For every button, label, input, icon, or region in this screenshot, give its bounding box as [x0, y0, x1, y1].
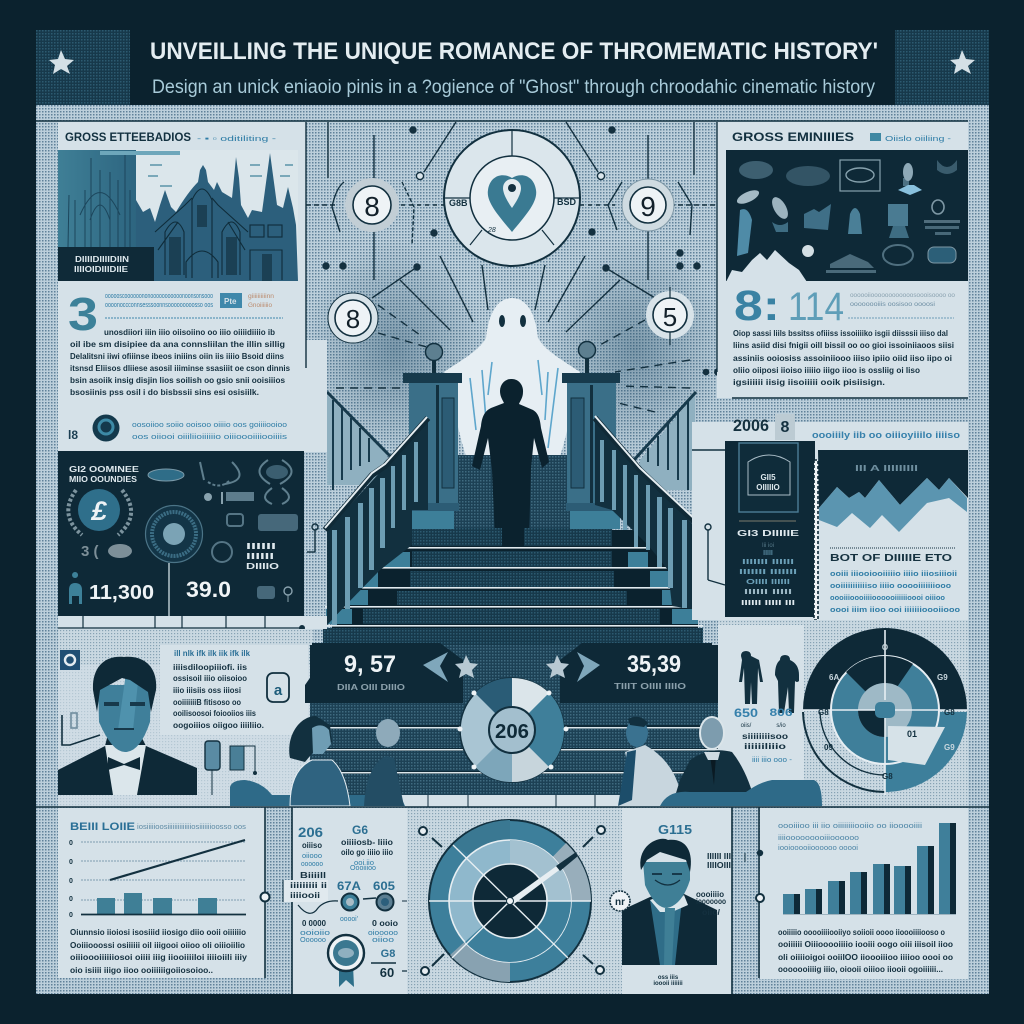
stat 8:114: 8: — [734, 282, 780, 330]
body paragraph: itsnsd Eliisos dliiese asosil iiiminse ssasiiit oe cson dinnis — [70, 364, 291, 373]
round icon row — [68, 414, 287, 442]
ring chart: 01 — [907, 729, 917, 739]
callout box: iiiiooii — [290, 891, 320, 900]
name code: G115 — [658, 822, 692, 837]
year badge: 8 — [781, 419, 790, 436]
side labels: iooooooo — [696, 897, 726, 906]
divider ticks under awards — [58, 616, 327, 631]
mountain chart: III A IIIIIIIII — [855, 464, 918, 473]
year badge — [775, 414, 795, 440]
cathedral caption: DIIIIDIIIIDIIN — [75, 255, 129, 264]
ring chart: G9 — [944, 743, 955, 752]
number badge 5 lower right — [646, 287, 694, 345]
panel: top right gross earnings — [717, 122, 968, 398]
ghost figure — [444, 298, 580, 468]
paragraph — [70, 928, 248, 975]
needle — [512, 852, 578, 904]
grey mini marks: 3 ( — [81, 543, 99, 560]
side labels: IIIIII III — [707, 852, 731, 861]
paragraph: oli oiiiioigoi ooiiIOO iioooiiioo iiiioo oooi oo — [778, 953, 953, 962]
front balusters right — [595, 420, 698, 610]
chart heading: BEIII LOIIE — [70, 821, 135, 833]
round icon row: oosoiioo soiio ooisoo oiiiio oos goiiiiooioo — [132, 420, 287, 429]
right star box — [895, 30, 989, 105]
side labels: IIIIOIII — [707, 861, 731, 870]
panel: top left gross earnings — [58, 122, 327, 452]
stat notes: oooooscoooooononooooooooooonoonsonsooo — [105, 291, 213, 300]
paragraph: oiiioooiiiiiiosoi oiiii iiig iiooiiiiloi iiiioiili iiiy — [70, 953, 248, 962]
award ribbon badge — [328, 935, 364, 987]
stat 39.0: 39.0 — [186, 577, 231, 602]
block heading: GI2 OOMINEE — [69, 465, 140, 474]
side label: IIIIII — [246, 542, 276, 551]
stat 8:114: 114 — [788, 285, 844, 329]
connector hook — [692, 450, 725, 585]
paragraph: ooiiiiio ooooiiiiooiiyo soiioii oooo iioooiiiiooso o — [778, 928, 945, 937]
year label: 2006 — [733, 416, 769, 435]
callout box: Biiiill — [300, 871, 326, 880]
portrait caption text — [173, 649, 264, 730]
left handrail — [325, 418, 428, 530]
cathedral caption — [58, 247, 154, 281]
small labels lower: ooooi' — [340, 914, 359, 923]
panel: lower right people and ring chart — [718, 620, 968, 806]
grey mini marks — [81, 543, 132, 560]
side labels: oiio/ — [702, 908, 721, 917]
side label: DIIIIO — [246, 562, 279, 571]
person: woman seated — [289, 716, 350, 806]
right stat banner: TIIIT OIIII IIIIO — [614, 682, 686, 691]
gear label — [610, 891, 630, 911]
blue paragraph: oooiiioooiiiioooooiiiiiioooi oiiioo — [830, 593, 945, 602]
big compass circle with location pin: 28 — [487, 227, 496, 234]
connector lines and dots — [303, 122, 721, 412]
panel: lower right 2006 block — [692, 414, 968, 620]
stat fraction: G8 — [381, 948, 395, 960]
stat notes — [848, 293, 956, 318]
chart notes: iiiiooooooooiiioooooo — [778, 835, 859, 842]
medal links — [298, 894, 413, 913]
body paragraph: liins asiid disi fnigii oill bissil oo oo gioi issoiniiaoos siisi — [733, 341, 954, 350]
chart notes — [778, 823, 923, 852]
poster panel: OIIII IIIIII — [746, 577, 790, 586]
concentric disk — [146, 506, 202, 616]
stat notes: Pte — [224, 297, 237, 306]
big compass circle with location pin — [444, 130, 580, 266]
body paragraph: bsosiinis pss osil i do bisbssii sins esi osisiilk. — [70, 388, 259, 397]
stat notes: giiiiiiiiiinn — [248, 294, 274, 300]
blue paragraph — [830, 548, 960, 614]
small connector hook — [307, 524, 318, 552]
body paragraph: unosdiiori iiin iiio oiisoiino oo iiio oiiiidiiiio ib — [104, 328, 275, 337]
portrait caption: ioooii iiiiiii — [653, 981, 683, 987]
poster panel: GII5 — [760, 473, 776, 482]
figure stats: 806 — [770, 707, 792, 719]
body paragraph: oil ibe sm disipiee da ana connsliilan the illin sillig — [70, 340, 285, 349]
bars — [783, 823, 956, 915]
small labels lower: oiioo — [372, 935, 394, 944]
short labels: oiiooo — [302, 851, 322, 860]
ring chart: O — [882, 643, 888, 652]
poster panel: IIIIII IIIII III — [741, 598, 795, 607]
device icons — [205, 741, 257, 795]
right stat banner — [546, 643, 718, 703]
tile strip under steps — [400, 795, 640, 807]
short labels: oilo go iiiio iiio — [341, 848, 393, 857]
side label: IIIIII — [246, 552, 274, 561]
number badge 9 upper right: 9 — [640, 191, 656, 222]
poster panel: OIIIIIO — [756, 483, 780, 492]
number badge 9 upper right — [608, 179, 692, 235]
portrait caption text: iiio iiisiis oss iiiosi — [173, 686, 241, 695]
cathedral caption: IIIIOIDIIIDIIE — [74, 265, 129, 274]
stat fraction: 60 — [380, 965, 394, 980]
title: UNVEILLING THE UNIQUE ROMANCE OF THROMEMATIC HISTORY' — [150, 38, 878, 65]
big compass circle with location pin: G8B — [449, 198, 468, 208]
figure stats — [734, 706, 793, 764]
body paragraph: oliio oiiposi iioiso iiiiio iiigo iioo is ossliig oi liso — [733, 366, 920, 375]
right stat banner: 35,39 — [627, 651, 681, 678]
stat notes: Gnoiiiiiio — [248, 303, 273, 309]
stat 67A: 67A — [337, 879, 361, 893]
ring chart: 6A — [829, 673, 839, 682]
sofa left — [230, 780, 405, 806]
line and bar chart: 0 — [69, 840, 73, 847]
dotted strip — [814, 460, 818, 620]
dark shading under the figure — [438, 455, 578, 545]
person icon — [69, 572, 82, 604]
paragraph: ooiiiiii Oiiiooooiiiio iooiii oogo oiii iiisoil iioo — [778, 940, 953, 949]
heading suffix — [870, 133, 952, 143]
stat notes — [105, 291, 283, 318]
microphone icon — [62, 713, 100, 745]
right handrail — [595, 418, 698, 525]
paragraph — [778, 928, 953, 974]
portrait: man in suit — [622, 839, 717, 965]
panel: bottom portrait — [610, 808, 731, 994]
poster panel: Iii ioi — [762, 543, 774, 549]
line and bar chart: 0 — [69, 859, 73, 866]
poster panel: IIIIIII IIIIIII — [739, 567, 797, 576]
stat notes: oooonoccconnsesssoonnsooooooooosso oos — [105, 300, 213, 309]
small labels lower — [300, 914, 398, 944]
stat notes: oooooiioooooooooooosoooisoooo oo — [850, 293, 956, 299]
callout box — [283, 871, 328, 902]
header banner — [36, 30, 989, 105]
side label — [212, 542, 279, 571]
back railing right — [634, 392, 696, 490]
medal with laurel: £ — [90, 496, 107, 526]
side labels — [696, 852, 731, 917]
figure stats: oiis/ — [741, 723, 752, 729]
left stat banner — [305, 643, 478, 703]
stat 605: 605 — [373, 879, 395, 893]
body paragraph: assiniis ooiosiss assoiniiooo iiiso ipiio oiid iiso iipo oi — [733, 354, 952, 363]
big compass circle with location pin: BSD — [557, 197, 577, 207]
right newel post — [562, 342, 622, 529]
small labels lower: 0 ooio — [372, 919, 398, 928]
stat G6: G6 — [352, 823, 368, 837]
body paragraph — [733, 329, 954, 387]
left star box — [36, 30, 130, 105]
number badge 8 lower left: 8 — [346, 304, 360, 334]
panel: bottom middle stats — [283, 807, 420, 994]
small labels lower: ooioiio — [300, 928, 330, 937]
portrait caption text: ill nlk ifk ilk iik ifk ilk — [174, 649, 251, 658]
heading: GROSS EMINIIIES — [732, 130, 854, 144]
small labels lower: oiooooo — [368, 928, 398, 937]
sub heading: BOT OF DIIIIIE ETO — [830, 552, 952, 564]
figure stats: 650 — [734, 706, 758, 720]
ring chart — [803, 628, 967, 795]
poster panel — [725, 441, 815, 617]
line and bar chart — [69, 840, 246, 919]
paragraph: Oiunnsio iioiosi isosiiid iiosigo diio ooii oiiiiiio — [70, 928, 246, 937]
wheel chart: 206 — [495, 721, 529, 743]
ring chart: G8 — [944, 708, 955, 717]
portrait caption text: ooiiiiiiiB fitisoso oo — [173, 698, 241, 707]
small labels lower: Oooooo — [300, 935, 326, 944]
right handrail highlight — [595, 416, 699, 523]
number badge 8 lower left — [328, 293, 378, 343]
big number 3: 3 — [68, 288, 98, 340]
medal with laurel — [68, 489, 131, 535]
sofa right — [660, 780, 822, 806]
body paragraph: bsin asoiik insig disjin lios soilish oo gsio snii ooisiiios — [70, 376, 286, 385]
short labels: oiiiso — [302, 841, 322, 850]
at icon: a — [274, 682, 283, 699]
short labels: ooi iio — [354, 858, 374, 867]
film icon wall — [726, 150, 968, 282]
ring chart: G8 — [818, 708, 829, 717]
main steps — [320, 528, 703, 645]
ring chart: 09 — [824, 743, 833, 752]
short labels — [301, 838, 393, 872]
left stat banner: DIIA OIII DIIIO — [337, 683, 405, 692]
short labels: Oooiiioo — [350, 863, 376, 872]
figure stats: iiii iiio ooo - — [752, 755, 793, 764]
wheel chart — [458, 678, 568, 782]
portrait caption text: iiiisdiloopiiiofi. iis — [173, 663, 248, 672]
portrait caption: oss iiis — [658, 975, 679, 981]
left newel post — [403, 344, 462, 529]
pill logo — [148, 469, 184, 481]
panel lower extension — [58, 340, 327, 452]
blue sub heading: oooiiily iib oo oiiioyiiilo iiiiso — [812, 430, 961, 440]
small stat icons — [257, 586, 292, 602]
heading suffix: Oiislo oiiliing - — [885, 134, 952, 143]
poster panel: IIIII — [763, 550, 773, 557]
award laurels top — [200, 460, 292, 504]
panel: central staircase scene — [303, 122, 725, 645]
poster panel: IIIIII IIIII — [744, 587, 792, 596]
panel: awards dark block — [58, 451, 304, 616]
at icon — [267, 673, 289, 702]
paragraph: oio isiiii iiigo iioo ooiiiiiigoiiosoioo.. — [70, 966, 213, 975]
blue paragraph: ooiiiiiiiiiiiso iiiio ooooiiiiiiiooo — [830, 581, 951, 590]
silhouette man — [472, 379, 549, 540]
paragraph: ooooooiiiig iiio, oiooii oiiioo iiooii ogoiiiiii... — [778, 965, 943, 974]
ring chart: G8 — [882, 772, 893, 781]
chart notes: oooiiioo iii iio oiiiiiiiiooiio oo iiooooiiii — [778, 823, 923, 830]
portrait caption — [653, 975, 683, 987]
small labels lower: 0 0000 — [302, 919, 327, 928]
callout pins — [419, 826, 605, 975]
person: older man seated — [364, 719, 404, 806]
figure stats: siiiiiiiisoo — [742, 732, 788, 741]
front balusters left — [327, 420, 428, 625]
line and bar chart: 0 — [69, 878, 73, 885]
gear label: nr — [615, 897, 625, 908]
callout box: iiiiiiiii ii — [290, 881, 327, 890]
stat notes: oooooooiiis oosisoo oooosi — [850, 302, 935, 308]
chart notes: iooiooooiioooooo ooooi — [778, 845, 858, 852]
small logo row — [204, 492, 298, 531]
figure stats: s/io — [776, 723, 786, 729]
heading suffix: - ▪ ▫ oditiliting - — [197, 134, 277, 143]
divider line across page — [36, 806, 989, 808]
connector dots — [756, 850, 764, 902]
portrait caption text: ooilisoosoi foiooiios iiis — [173, 709, 256, 718]
halftone shading — [305, 240, 725, 460]
back railing left — [327, 392, 390, 490]
paragraph: Ooiiiooossi osiiiiii oil iiigooi oiioo oli oiiioiilio — [70, 941, 245, 950]
cathedral illustration — [58, 150, 298, 281]
number badge 8 upper left: 8 — [364, 191, 380, 222]
left handrail highlight — [325, 417, 427, 528]
ring chart: G9 — [937, 673, 948, 682]
person: man in vest — [618, 717, 680, 806]
panel: bottom right bar chart — [760, 808, 968, 979]
left stat banner: 9, 57 — [344, 651, 396, 678]
body paragraph: Oiop sassi liils bssitss ofiiiss issoiiiiko isgii diisssii iiiso dal — [733, 329, 948, 338]
side labels: oooiiiio — [696, 890, 724, 899]
panel: lower steps with people — [230, 643, 822, 807]
stat fraction — [371, 948, 420, 980]
blue paragraph: oooi iiim iioo ooi iiiiiiioooiiooo — [830, 605, 960, 614]
portrait caption text: oogoiiios oiigoo iiiiliio. — [173, 721, 264, 730]
mountain chart — [818, 450, 968, 532]
short labels: oooooo — [301, 859, 323, 868]
two figure icons — [739, 651, 799, 713]
block subheading: MIIO OOUNDIES — [69, 475, 138, 484]
poster panel: IIIIIII IIIIII — [742, 557, 794, 566]
number badge 8 upper left — [332, 178, 414, 245]
body paragraph: Delalitsni iiwi ofiiinse ibeos iniiins oiin iis iiiio Bsoid diins — [70, 352, 285, 361]
blue paragraph: ooiii iiiooiooiiiiio iiiio iiiosiiioii — [830, 569, 957, 578]
round icon row: oos oiiooi oiiiliioiiiiiio oiiioooiiiiooiiiis — [132, 432, 287, 441]
number badge 5 lower right: 5 — [663, 302, 677, 332]
poster panel: GI3 DIIIIIE — [737, 529, 800, 538]
heading: GROSS ETTEEBADIOS — [65, 130, 191, 144]
chart heading note: iosiiiiioosiiiiiiiiiiiiiiosiiiiiiioosso oos — [137, 824, 247, 831]
vertical connectors — [732, 807, 759, 994]
line and bar chart: 0 — [69, 912, 73, 919]
stat 206: 206 — [298, 824, 323, 840]
panel: left portrait section — [58, 629, 313, 807]
bottom radial chart — [407, 808, 622, 994]
person: man in suit — [672, 717, 756, 806]
stat 11,300: 11,300 — [89, 582, 154, 604]
square icon — [60, 650, 80, 670]
line and bar chart: 0 — [69, 896, 73, 903]
stat 8:114 — [734, 282, 844, 330]
figure stats: iiiiiiliiio — [744, 742, 786, 751]
panel: bottom left combined chart — [58, 807, 270, 978]
body paragraph: igsiiiiii iisig iisoiiiii ooik pisiisign. — [733, 378, 885, 387]
portrait: man in tuxedo — [58, 657, 197, 795]
short labels: oiiiiosb- liiio — [341, 838, 393, 847]
body paragraph — [70, 328, 291, 397]
subtitle: Design an unick eniaoio pinis in a ?ogience of "Ghost" through chroodahic cinematic history — [152, 77, 875, 98]
portrait caption text: ossisoil iiio oiisoioo — [173, 674, 247, 683]
round icon row: l8 — [68, 428, 78, 442]
